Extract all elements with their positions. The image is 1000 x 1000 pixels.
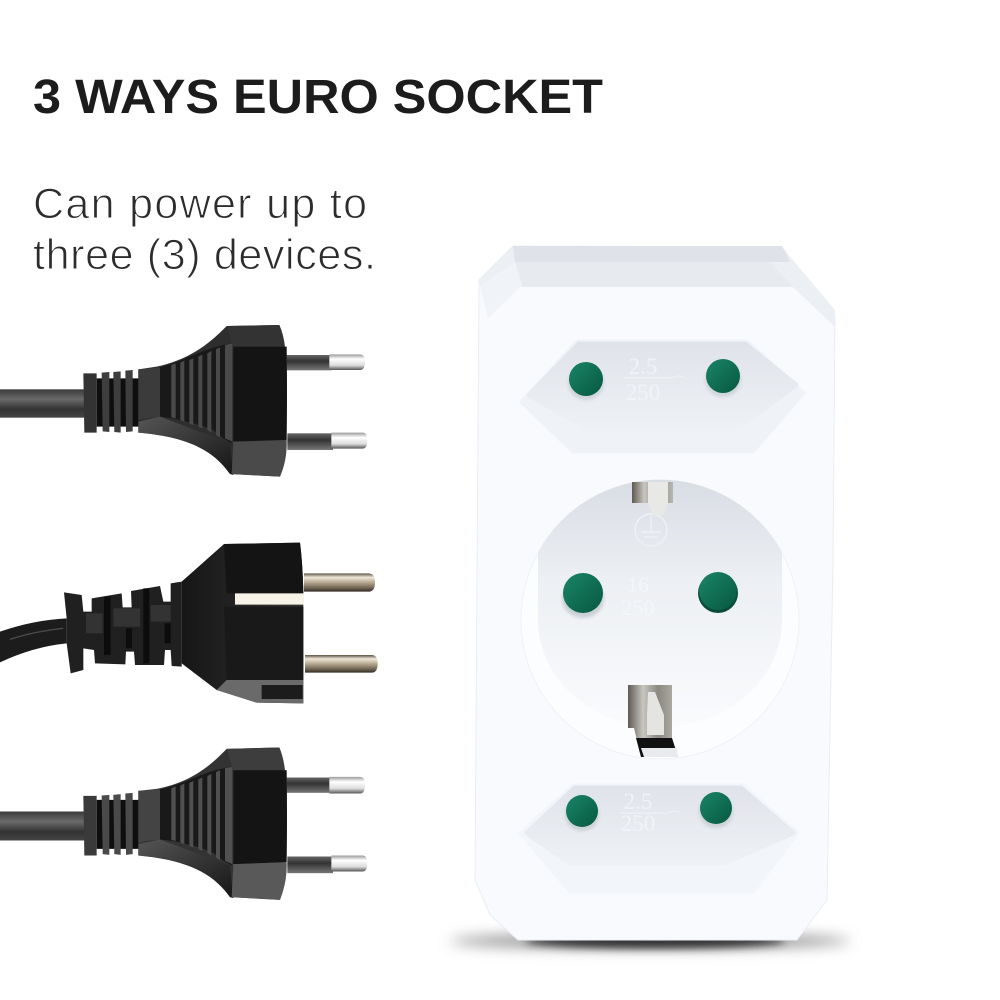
- lower earth clip: [628, 685, 678, 757]
- top euro recess: [521, 341, 804, 452]
- subtitle text: three (3) devices.: [33, 231, 376, 279]
- rating marks: [620, 789, 680, 836]
- rating marks: 250: [622, 595, 654, 620]
- earth symbol: [635, 514, 667, 546]
- rating marks: 2.5: [624, 789, 652, 814]
- rating marks: 16: [627, 572, 649, 597]
- rating marks: 2.5: [629, 354, 657, 379]
- right contact: [705, 359, 741, 397]
- subtitle text: [33, 180, 376, 279]
- plug: bottom two-pin euro plug: [0, 747, 367, 900]
- subtitle text: Can power up to: [33, 180, 367, 228]
- plug: middle schuko plug: [0, 543, 378, 703]
- top bevel: [513, 246, 790, 262]
- socket shadow: [450, 934, 850, 948]
- bottom euro recess: [520, 785, 798, 892]
- body outline: [475, 246, 835, 940]
- right contact: [699, 792, 733, 828]
- left contact: [565, 795, 599, 831]
- rating marks: [624, 354, 684, 405]
- round socket recess: [521, 480, 799, 759]
- left contact: [568, 362, 604, 400]
- rear step: [479, 246, 835, 327]
- plug: top two-pin euro plug: [0, 325, 367, 477]
- socket body: [475, 246, 835, 940]
- left contact: [562, 573, 604, 618]
- rating marks: 250: [621, 811, 655, 836]
- rating marks: [622, 572, 654, 620]
- title: 3 WAYS EURO SOCKET: [33, 71, 603, 124]
- upper earth clip: [632, 482, 673, 515]
- right contact: [698, 572, 738, 613]
- rating marks: 250: [626, 380, 660, 405]
